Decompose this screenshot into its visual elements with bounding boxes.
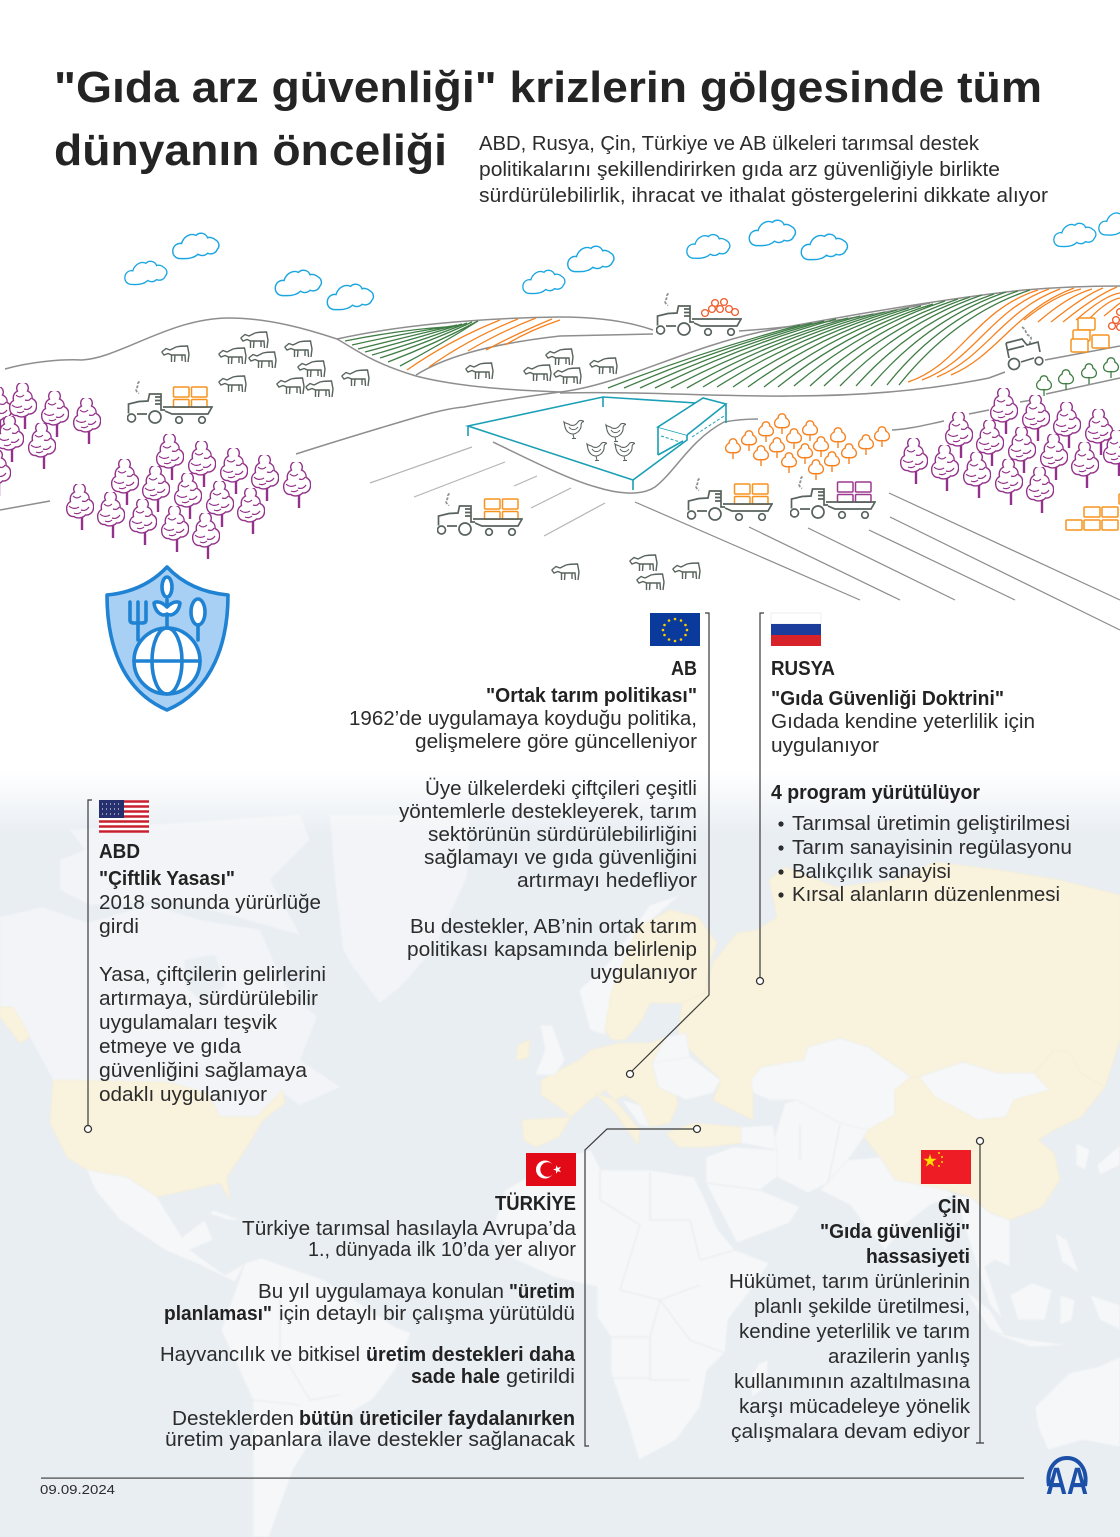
EU text: Üye ülkelerdeki çiftçileri çeşitli	[425, 778, 697, 800]
red round bales	[1109, 309, 1120, 330]
purple trees: left grove	[0, 382, 101, 496]
leader line: China	[976, 1138, 984, 1443]
Türkiye text: 1., dünyada ilk 10’da yer alıyor	[308, 1239, 576, 1261]
Russia programme list: Balıkçılık sanayisi	[792, 861, 951, 883]
Türkiye text: Hayvancılık ve bitkisel	[160, 1344, 360, 1366]
EU text: sektörünün sürdürülebilirliğini	[428, 824, 697, 846]
tractor with orange crates	[438, 494, 522, 535]
title: "Gıda arz güvenliği" krizlerin gölgesinde tüm	[54, 63, 1042, 112]
Russia programme list: Tarımsal üretimin geliştirilmesi	[792, 813, 1070, 835]
Russia programme list: Kırsal alanların düzenlenmesi	[792, 884, 1060, 906]
small tractor	[1006, 327, 1043, 370]
USA text	[99, 841, 326, 1106]
date: 09.09.2024	[40, 1482, 115, 1497]
footer rule	[41, 1478, 1024, 1479]
Türkiye text: Türkiye tarımsal hasılayla Avrupa’da	[242, 1218, 577, 1240]
flag: EU	[650, 613, 700, 646]
China text: hassasiyeti	[866, 1246, 970, 1268]
EU text: Bu destekler, AB’nin ortak tarım	[410, 916, 697, 938]
chickens	[564, 420, 635, 460]
panel: Russia	[756, 613, 1072, 984]
EU text	[349, 658, 697, 984]
USA text: girdi	[99, 916, 139, 938]
flag: Türkiye	[526, 1153, 576, 1186]
tractor with purple crates	[790, 476, 875, 518]
panel: USA	[84, 800, 326, 1132]
Türkiye text: üretim destekleri daha	[366, 1344, 576, 1366]
Türkiye text: üretim yapanlara ilave destekler sağlanacak	[165, 1429, 576, 1451]
leader line: Russia	[756, 613, 764, 984]
Türkiye text	[160, 1192, 577, 1451]
leader line: USA	[84, 800, 92, 1132]
leader line: Türkiye	[585, 1126, 700, 1446]
subtitle text	[479, 133, 1048, 207]
flag: Russia	[771, 613, 821, 646]
subtitle text: politikalarını şekillendirirken gıda arz güvenliğiyle birlikte	[479, 159, 1000, 181]
China text: planlı şekilde üretilmesi,	[754, 1296, 970, 1318]
Türkiye text: Bu yıl uygulamaya konulan	[258, 1281, 504, 1303]
Russia text: "Gıda Güvenliği Doktrini"	[771, 688, 1004, 710]
panel: European Union	[349, 613, 709, 1078]
Türkiye text: "üretim	[509, 1281, 575, 1303]
Russia text: 4 program yürütülüyor	[771, 782, 980, 804]
Türkiye text: planlaması"	[164, 1303, 272, 1325]
USA text: uygulamaları teşvik	[99, 1012, 278, 1034]
Russia text: uygulanıyor	[771, 735, 879, 757]
logo: AA: AA	[1046, 1461, 1088, 1503]
panel: Türkiye	[160, 1126, 700, 1451]
EU text: sağlamayı ve gıda güvenliğini	[424, 847, 697, 869]
green trees	[1037, 358, 1118, 396]
crop field: large hill	[608, 287, 1120, 388]
USA text: etmeye ve gıda	[99, 1036, 242, 1058]
title: dünyanın önceliği	[54, 126, 447, 175]
Türkiye text: sade hale	[411, 1366, 500, 1388]
tractor with orange crates	[128, 382, 212, 423]
world map background	[0, 771, 1120, 1537]
USA text: Yasa, çiftçilerin gelirlerini	[99, 964, 326, 986]
EU text: AB	[671, 658, 697, 680]
China text: Hükümet, tarım ürünlerinin	[729, 1271, 970, 1293]
orange trees	[726, 414, 889, 480]
leader line: EU	[626, 613, 709, 1078]
subtitle text: sürdürülebilirlik, ihracat ve ithalat göstergelerini dikkate alıyor	[479, 185, 1048, 207]
Russia text	[771, 658, 1035, 804]
title	[54, 63, 1042, 175]
Russia text: RUSYA	[771, 658, 835, 680]
China text: kendine yeterlilik ve tarım	[739, 1321, 970, 1343]
purple trees: right grove	[901, 387, 1120, 513]
Türkiye text: bütün üreticiler faydalanırken	[299, 1408, 575, 1430]
USA text: güvenliğini sağlamaya	[99, 1060, 308, 1082]
EU text: yöntemlerle destekleyerek, tarım	[399, 801, 697, 823]
EU text: "Ortak tarım politikası"	[486, 685, 697, 707]
China text: kullanımının azaltılmasına	[734, 1371, 971, 1393]
China text	[729, 1195, 971, 1443]
orange hay stack	[1071, 318, 1109, 352]
icon: food security shield	[107, 567, 228, 710]
China text: çalışmalara devam ediyor	[731, 1421, 970, 1443]
purple trees: centre grove	[67, 433, 311, 559]
China text: "Gıda güvenliği"	[820, 1221, 970, 1243]
EU text: artırmayı hedefliyor	[517, 870, 697, 892]
USA text: ABD	[99, 841, 140, 863]
China text: arazilerin yanlış	[828, 1346, 970, 1368]
orange crates pile	[1066, 494, 1120, 530]
crop field: left hill	[345, 318, 560, 370]
EU text: gelişmelere göre güncelleniyor	[415, 731, 697, 753]
flag: China	[921, 1150, 971, 1184]
Russia programme list	[778, 813, 1072, 906]
Russia text: Gıdada kendine yeterlilik için	[771, 711, 1035, 733]
USA text: 2018 sonunda yürürlüğe	[99, 892, 321, 914]
China text: karşı mücadeleye yönelik	[739, 1396, 971, 1418]
USA text: "Çiftlik Yasası"	[99, 868, 235, 890]
panel: China	[729, 1138, 984, 1443]
Türkiye text: için detaylı bir çalışma yürütüldü	[279, 1303, 575, 1325]
cows	[162, 332, 700, 590]
landscape: hills and roads	[0, 286, 1120, 630]
USA text: odaklı uygulanıyor	[99, 1084, 267, 1106]
USA text: artırmaya, sürdürülebilir	[99, 988, 318, 1010]
subtitle text: ABD, Rusya, Çin, Türkiye ve AB ülkeleri tarımsal destek	[479, 133, 980, 155]
Türkiye text: getirildi	[506, 1366, 575, 1388]
flag: USA	[99, 800, 149, 833]
EU text: politikası kapsamında belirlenip	[407, 939, 697, 961]
EU text: uygulanıyor	[590, 962, 697, 984]
tractor with round bales	[656, 294, 741, 335]
clouds	[125, 212, 1120, 310]
Türkiye text: TÜRKİYE	[495, 1192, 576, 1215]
China text: ÇİN	[938, 1195, 970, 1218]
EU text: 1962’de uygulamaya koyduğu politika,	[349, 708, 697, 730]
poultry house	[468, 397, 726, 490]
tractor with orange crates	[688, 478, 772, 520]
Türkiye text: Desteklerden	[172, 1408, 294, 1430]
Russia programme list: Tarım sanayisinin regülasyonu	[792, 837, 1072, 859]
